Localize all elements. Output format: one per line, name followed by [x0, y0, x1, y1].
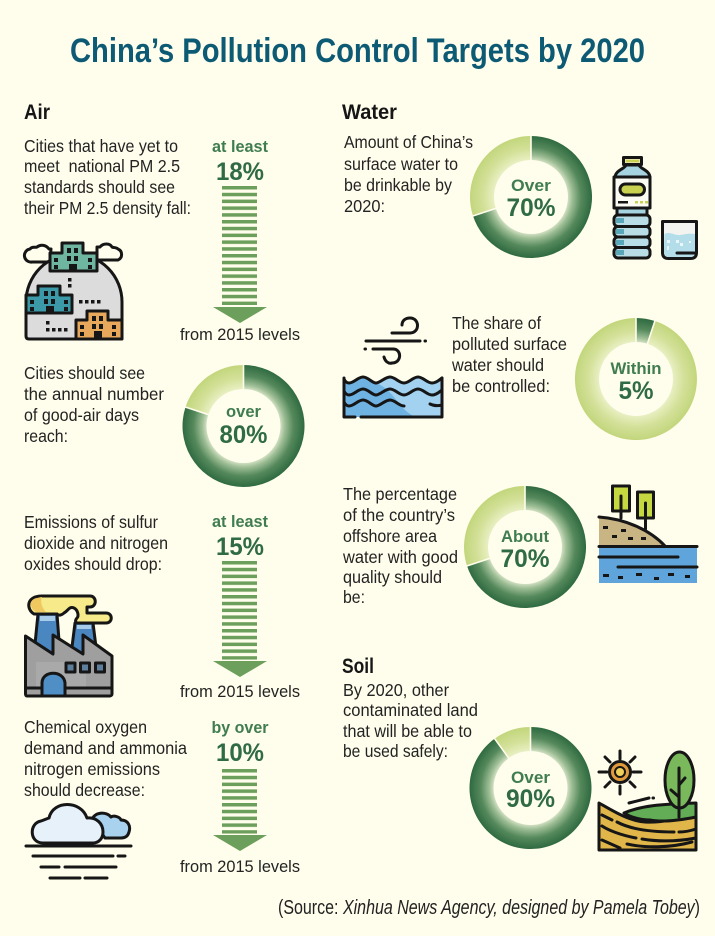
text block: contaminated land — [343, 680, 478, 761]
arrow: by over 10%: 10% — [216, 739, 264, 767]
donut: over 80%: 80% — [220, 421, 268, 449]
text block: chemical oxygen: nitrogen emissions — [24, 759, 160, 779]
text block: polluted water: water should — [451, 355, 544, 375]
arrow: at least 18%: at least — [212, 138, 268, 156]
text block: drinkable: be drinkable by — [344, 175, 452, 195]
text block: good-air days: Cities should see — [24, 363, 145, 383]
icon: city — [24, 243, 122, 339]
panel: air — [24, 101, 305, 878]
text block: drinkable — [344, 132, 473, 216]
text block: drinkable: surface water to — [344, 154, 458, 174]
text block: polluted water — [451, 313, 567, 396]
icon: bottle and glass — [614, 158, 696, 258]
donut: about 70%: 70% — [500, 545, 550, 573]
text block: sulfur dioxide — [24, 512, 168, 574]
heading: air: Air — [24, 101, 50, 124]
arrow: at least 18%: from 2015 levels — [180, 325, 300, 344]
text block: contaminated land: contaminated land — [343, 700, 478, 720]
text block: drinkable: 2020: — [344, 196, 385, 216]
text block: PM 2.5 — [24, 136, 191, 218]
donut: over 70%: 70% — [506, 194, 556, 222]
icon: clouds — [26, 804, 131, 878]
text block: offshore water: offshore area — [343, 526, 437, 546]
icon: coast — [599, 486, 697, 583]
text block: contaminated land: be used safely: — [343, 741, 448, 761]
text block: chemical oxygen: Chemical oxygen — [24, 717, 147, 737]
arrow: at least 15%: from 2015 levels — [180, 682, 300, 701]
text block: polluted water: The share of — [452, 313, 541, 333]
panel: soil — [342, 655, 696, 850]
icon: wind and water — [344, 318, 442, 417]
text block: polluted water: be controlled: — [452, 376, 550, 396]
donut: over 80% — [183, 364, 305, 487]
donut: over 80%: over — [226, 403, 262, 421]
donut: about 70%: About — [501, 528, 549, 546]
donut: over 90% — [469, 726, 591, 849]
text block: good-air days — [24, 363, 164, 446]
arrow: by over 10%: by over — [212, 719, 269, 737]
arrow: at least 15%: at least — [212, 513, 268, 531]
panel: water — [342, 101, 697, 608]
text block: offshore water: The percentage — [343, 484, 457, 504]
donut: within 5%: 5% — [618, 377, 654, 405]
text block: offshore water: quality should — [343, 567, 442, 587]
heading: water: Water — [342, 101, 397, 124]
text block: sulfur dioxide: dioxide and nitrogen — [24, 533, 168, 553]
arrow: at least 18%: 18% — [216, 158, 264, 186]
text block: PM 2.5: meet national PM 2.5 — [24, 156, 180, 176]
text block: offshore water: water with good — [342, 547, 458, 567]
text block: PM 2.5: their PM 2.5 density fall: — [24, 198, 191, 218]
text block: contaminated land: that will be able to — [343, 721, 472, 741]
donut: over 70%: Over — [511, 177, 552, 195]
text block: good-air days: of good-air days — [24, 405, 139, 425]
text block: chemical oxygen — [24, 717, 187, 800]
donut: over 70% — [470, 135, 592, 258]
text block: offshore water — [342, 484, 458, 607]
text block: contaminated land: By 2020, other — [343, 680, 449, 700]
text block: polluted water: polluted surface — [452, 334, 567, 354]
arrow: by over 10% — [180, 719, 300, 876]
text block: drinkable: Amount of China’s — [344, 132, 473, 152]
donut: within 5% — [575, 317, 697, 440]
arrow: by over 10%: from 2015 levels — [180, 857, 300, 876]
heading: soil: Soil — [342, 655, 374, 678]
text block: sulfur dioxide: Emissions of sulfur — [24, 512, 158, 532]
text block: chemical oxygen: demand and ammonia — [24, 738, 187, 758]
arrow: at least 18% — [180, 138, 300, 344]
text block: chemical oxygen: should decrease: — [24, 780, 145, 800]
donut: about 70% — [464, 485, 586, 608]
arrow: at least 15%: 15% — [216, 533, 264, 561]
text block: good-air days: reach: — [24, 426, 68, 446]
donut: over 90%: Over — [511, 769, 551, 787]
text block: good-air days: the annual number — [24, 384, 164, 404]
text block: offshore water: be: — [343, 587, 365, 607]
icon: sun and field — [599, 751, 696, 850]
donut: within 5%: Within — [610, 360, 662, 378]
arrow: at least 15% — [180, 513, 300, 701]
text block: PM 2.5: standards should see — [24, 177, 175, 197]
donut: over 90%: 90% — [506, 785, 555, 813]
icon: factory — [26, 596, 112, 696]
text block: PM 2.5: Cities that have yet to — [24, 136, 178, 156]
text block: sulfur dioxide: oxides should drop: — [24, 554, 162, 574]
text block: offshore water: of the country’s — [343, 505, 455, 525]
